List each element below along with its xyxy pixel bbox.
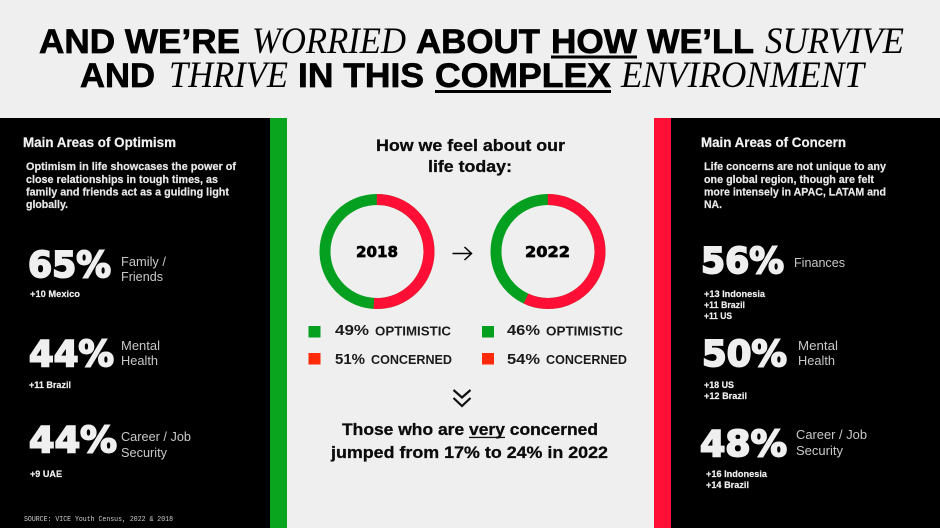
icon: double chevron down — [454, 390, 470, 406]
donut chart: 2022 — [496, 200, 600, 304]
legend: 2022: 46% — [507, 322, 540, 339]
stat: career and job security 48%: 48% — [700, 424, 787, 465]
panel: optimism — [0, 118, 287, 528]
stat: mental health 50%: 50% — [702, 334, 787, 375]
text block: optimism summary: globally. — [26, 199, 68, 211]
heading: main areas of optimism: Main Areas of Optimism — [23, 135, 176, 150]
stat: career and job security 48%: +16 Indonesia — [706, 469, 768, 480]
legend: 2018: OPTIMISTIC — [375, 324, 451, 338]
title: ABOUT — [416, 23, 540, 61]
stat: mental health 50% — [702, 334, 838, 402]
stat: career and job security 44%: Security — [121, 446, 168, 460]
title: WE’LL — [647, 23, 754, 61]
legend: 2018: 49% — [335, 322, 369, 339]
title: WORRIED — [252, 21, 406, 62]
stat: family and friends 65%: Family / — [121, 255, 167, 269]
text block: optimism summary: family and friends act as a guiding light — [26, 186, 229, 198]
stat: mental health 50%: +12 Brazil — [704, 391, 747, 402]
stat: finances 56% — [701, 241, 845, 322]
stat: family and friends 65%: Friends — [121, 270, 163, 284]
stat: career and job security 44%: Career / Job — [121, 430, 191, 444]
text block: optimism summary: close relationships in tough times, as — [26, 174, 218, 186]
legend: 2018: 51% — [335, 351, 365, 368]
stat: mental health 44%: 44% — [29, 334, 114, 375]
stat: career and job security 44% — [29, 420, 191, 480]
legend: 2018 — [308, 322, 452, 368]
title: ENVIRONMENT — [620, 55, 866, 96]
stat: career and job security 44%: +9 UAE — [30, 469, 62, 480]
legend: 2022 — [482, 322, 627, 368]
text block: concern summary: Life concerns are not unique to any — [704, 161, 887, 173]
stat: mental health 50%: Mental — [798, 339, 838, 353]
stat: finances 56%: +11 Brazil — [704, 300, 745, 311]
stat: career and job security 44%: 44% — [29, 420, 117, 461]
stat: mental health 44%: Mental — [121, 339, 160, 353]
heading: main areas of concern: Main Areas of Concern — [701, 135, 846, 150]
legend: 2022: CONCERNED — [546, 353, 627, 367]
text block: concern summary: more intensely in APAC, LATAM and — [704, 186, 886, 198]
heading: how we feel: How we feel about our — [376, 136, 565, 155]
stat: finances 56%: +11 US — [704, 311, 732, 322]
legend: 2018: CONCERNED — [371, 353, 452, 367]
stat: family and friends 65%: +10 Mexico — [30, 289, 80, 300]
text block: concern summary: NA. — [704, 199, 722, 211]
callout: very concerned: jumped from 17% to 24% in 2022 — [330, 443, 608, 462]
legend: 2022: 54% — [507, 351, 540, 368]
stat: mental health 44%: +11 Brazil — [29, 380, 71, 391]
stat: career and job security 48%: Career / Job — [796, 428, 867, 442]
title: THRIVE — [169, 55, 288, 96]
stat: career and job security 48% — [700, 424, 867, 491]
stat: finances 56%: Finances — [794, 256, 845, 270]
legend: 2022: OPTIMISTIC — [546, 324, 623, 338]
stat: family and friends 65%: 65% — [28, 245, 111, 286]
stat: mental health 44%: Health — [121, 354, 158, 368]
donut chart: 2018 — [325, 200, 429, 304]
stat: finances 56%: 56% — [701, 241, 784, 282]
stat: career and job security 48%: Security — [796, 444, 844, 458]
callout: very concerned: Those who are very concerned — [342, 420, 598, 439]
text block: concern summary: one global region, though are felt — [704, 174, 874, 186]
stat: mental health 50%: Health — [798, 354, 835, 368]
panel: concern — [654, 118, 940, 528]
title: COMPLEX — [435, 57, 611, 95]
donut chart: 2018: 2018 — [356, 243, 398, 261]
title — [39, 21, 904, 96]
callout: very concerned — [330, 420, 608, 462]
text block: optimism summary: Optimism in life showcases the power of — [26, 161, 236, 173]
stat: family and friends 65% — [28, 245, 167, 300]
title: AND WE’RE — [39, 23, 240, 61]
arrow: 2018 to 2022 — [452, 247, 472, 260]
source note: SOURCE: VICE Youth Census, 2022 & 2018 — [24, 516, 173, 524]
heading: how we feel: life today: — [428, 157, 512, 176]
stat: career and job security 48%: +14 Brazil — [706, 480, 749, 491]
panel: how we feel — [308, 136, 627, 462]
title: SURVIVE — [765, 21, 904, 62]
text block: optimism summary — [26, 161, 236, 211]
heading: how we feel — [376, 136, 565, 176]
stat: finances 56%: +13 Indonesia — [704, 289, 766, 300]
stat: mental health 50%: +18 US — [704, 380, 734, 391]
title: AND — [80, 57, 155, 95]
stat: mental health 44% — [29, 334, 160, 391]
title: IN THIS — [298, 57, 424, 95]
text block: concern summary — [704, 161, 887, 211]
title: HOW — [551, 23, 638, 61]
donut chart: 2022: 2022 — [525, 243, 570, 261]
